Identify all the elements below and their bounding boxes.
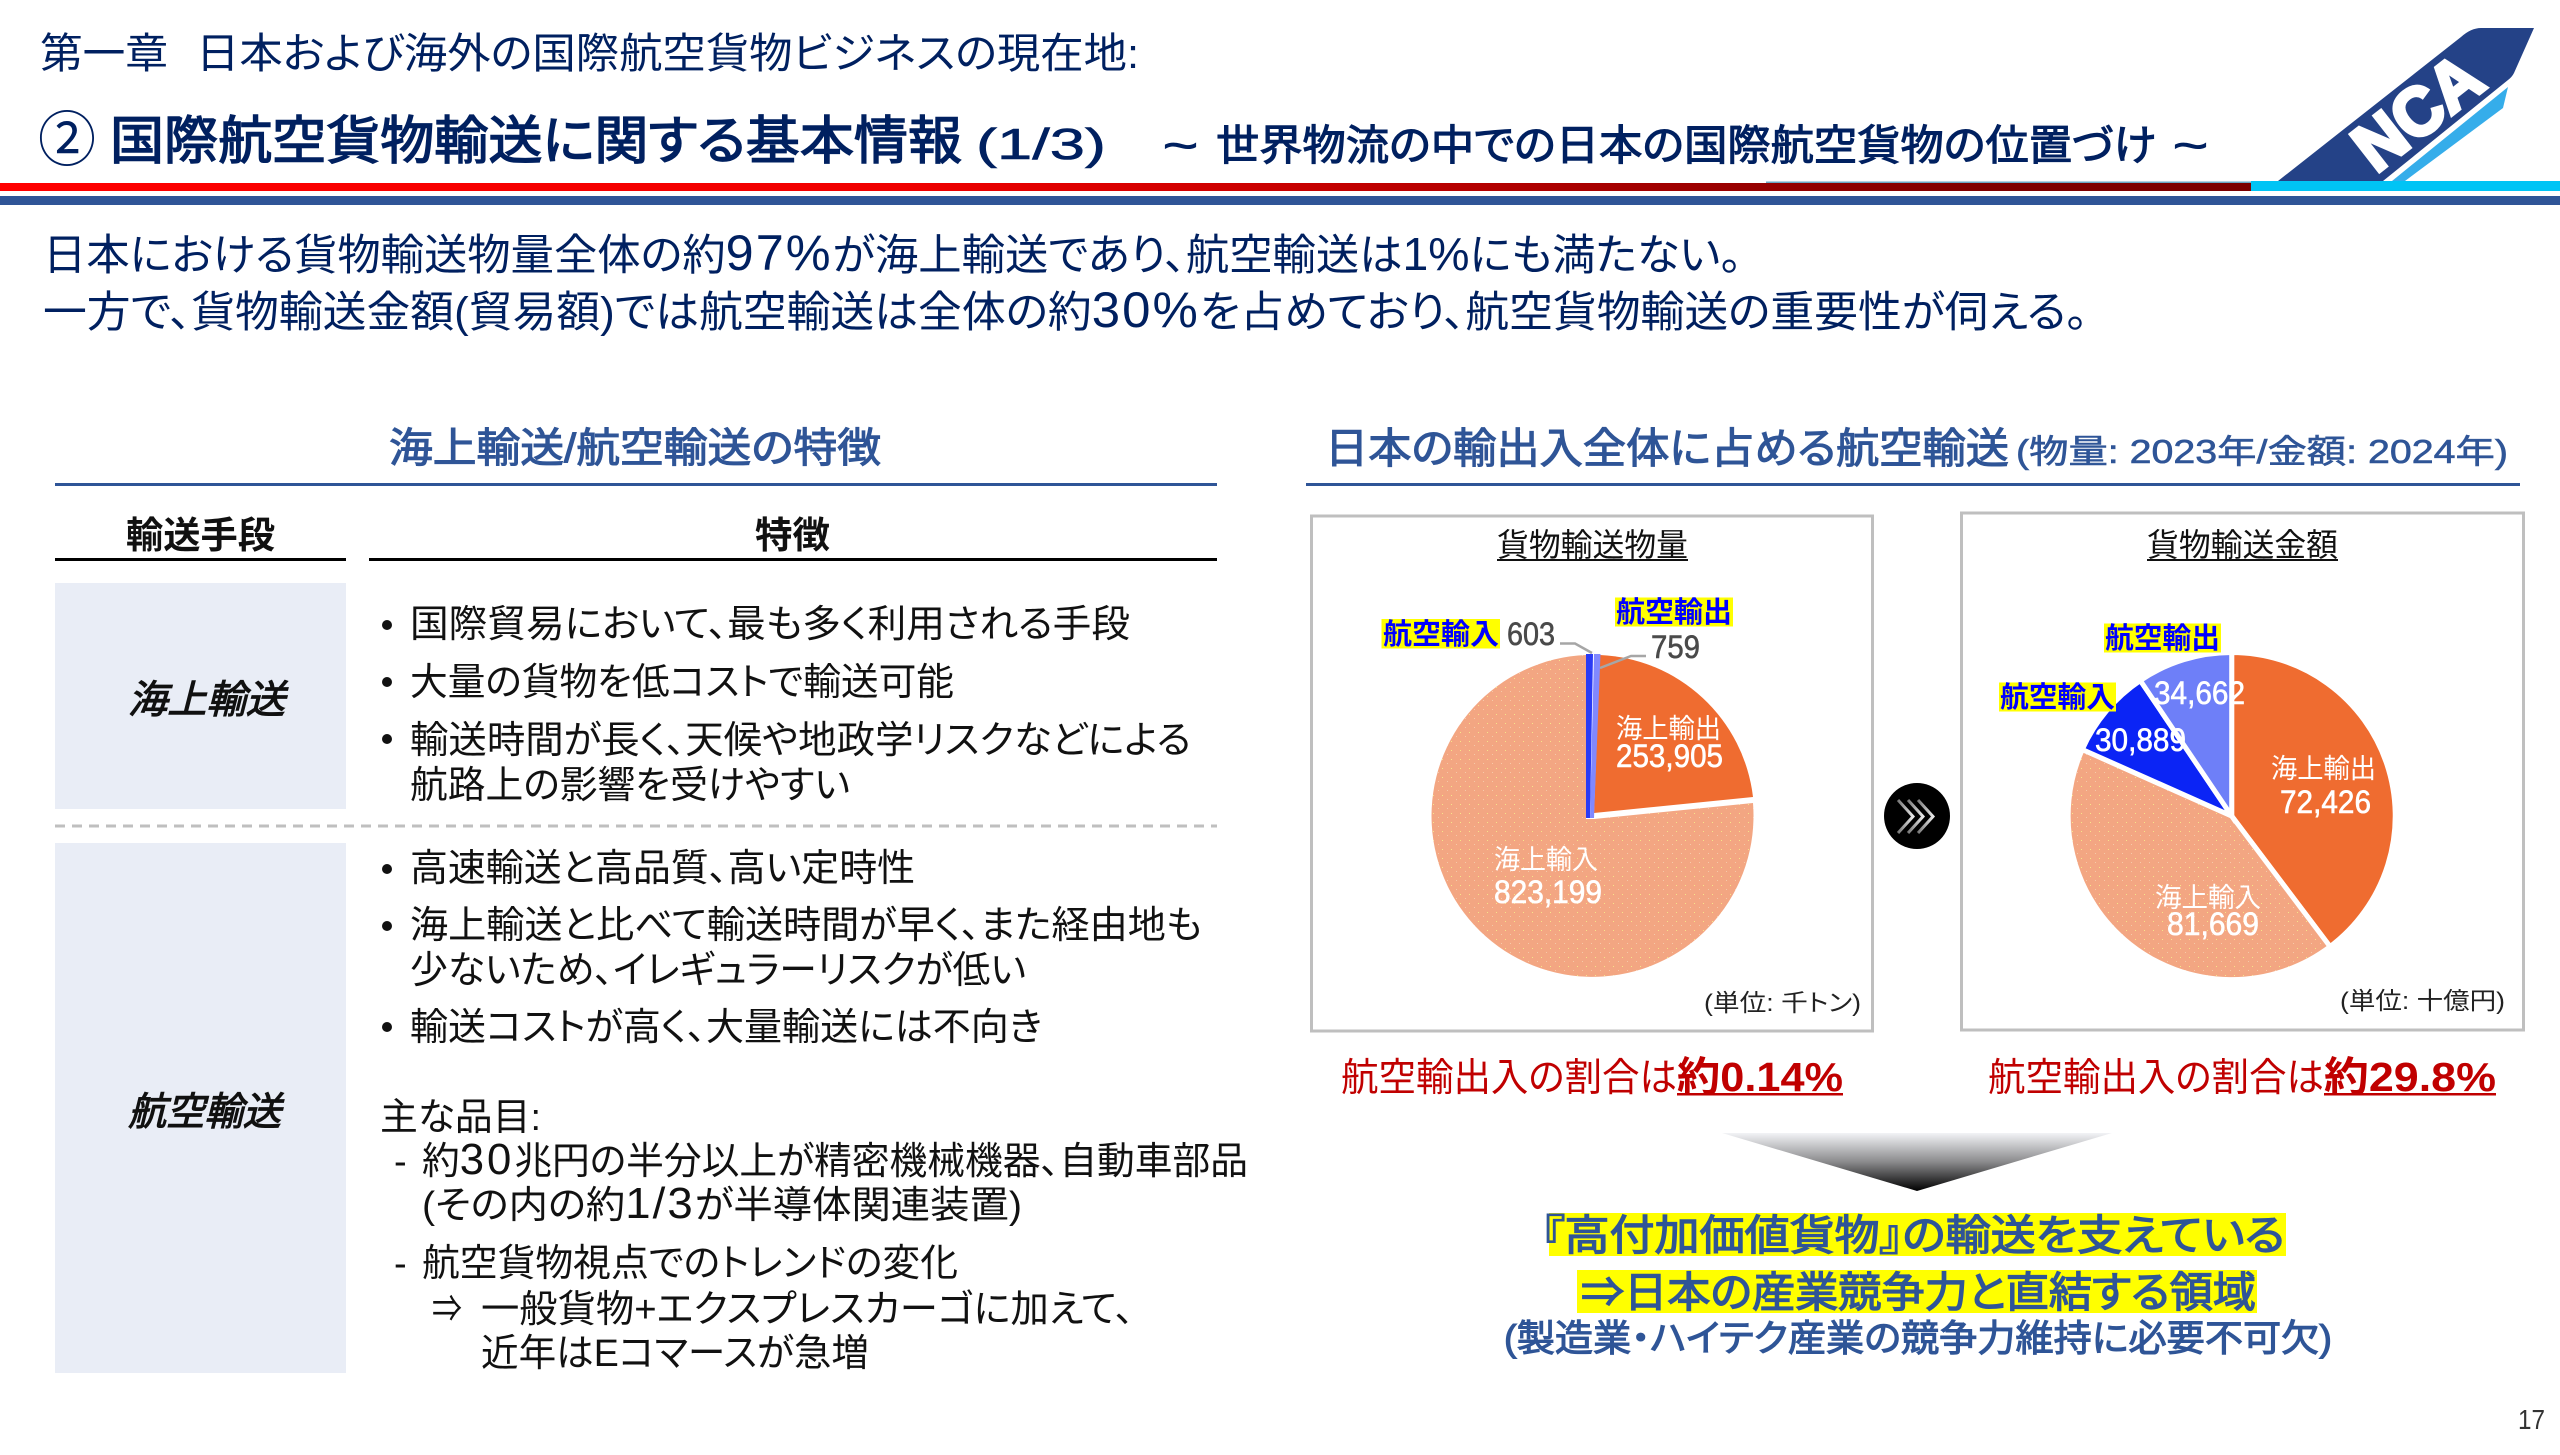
icon: NCA logo tail: NCA <box>2338 39 2497 186</box>
label: sea export value: 海上輸出 <box>2271 754 2376 784</box>
heading: air share of Japan trade: (物量: 2023年/金額: 2024年) <box>2016 433 2508 470</box>
callout: volume air share <box>1341 1054 1843 1100</box>
label: sea import volume: 823,199 <box>1494 874 1602 910</box>
label: air import value: 航空輸入 <box>2000 681 2115 714</box>
header: subtitle: ~ <box>1163 122 1198 169</box>
air transport bullet list: 高速輸送と高品質、高い定時性 <box>410 848 915 890</box>
heading: air share of Japan trade <box>1306 425 2520 486</box>
conclusion text <box>1504 1212 2332 1359</box>
label: sea export volume: 海上輸出 <box>1616 714 1721 744</box>
row label: sea transport <box>55 583 346 809</box>
sea transport bullet list: 輸送時間が長く、天候や地政学リスクなどによる <box>410 720 1191 762</box>
row label: air transport <box>55 843 346 1373</box>
table header: transport mode: 輸送手段 <box>126 515 275 556</box>
intro text: 一方で、貨物輸送金額(貿易額)では航空輸送は全体の約 30%を占めており、航空貨物輸送の重要性が伺える。 <box>43 282 2088 338</box>
table header: characteristics: 特徴 <box>755 515 830 556</box>
row label: sea transport: 海上輸送 <box>128 679 289 722</box>
callout: value air share <box>1988 1054 2496 1100</box>
main cargo items list: - <box>394 1141 407 1183</box>
pie slices: value <box>2068 652 2395 980</box>
main cargo items list <box>380 1097 1248 1375</box>
label: sea export volume <box>1616 714 1723 774</box>
chart title: value: 貨物輸送金額 <box>2147 527 2338 563</box>
header: chapter title: 第一章 <box>40 30 168 77</box>
label: air import value: 30,889 <box>2095 722 2186 758</box>
label: sea import volume: 海上輸入 <box>1494 845 1598 875</box>
header: subtitle: 世界物流の中での日本の国際航空貨物の位置づけ <box>1216 122 2156 169</box>
label: sea import value <box>2155 883 2261 942</box>
panel: cargo volume pie chart <box>1312 516 1872 1031</box>
label: air export volume <box>1615 596 1733 665</box>
label: air export value <box>2104 622 2245 711</box>
air transport bullet list: 少ないため、イレギュラーリスクが低い <box>410 950 1026 992</box>
label: sea import value: 81,669 <box>2167 906 2259 942</box>
table header: characteristics <box>369 515 1217 561</box>
label: sea import volume <box>1494 845 1602 910</box>
main cargo items list: 約30兆円の半分以上が精密機械機器、自動車部品 <box>422 1135 1248 1184</box>
header: subtitle: ~ <box>2173 122 2208 169</box>
main cargo items list: 一般貨物+エクスプレスカーゴに加えて、 <box>481 1289 1134 1331</box>
header: section title: 国際航空貨物輸送に関する基本情報 <box>110 113 962 171</box>
intro text: 日本における貨物輸送物量全体の約97%が海上輸送であり、航空輸送は1%にも満たない。 <box>43 225 1742 281</box>
heading: characteristics: 海上輸送/航空輸送の特徴 <box>389 425 881 471</box>
table header: transport mode <box>55 515 346 561</box>
panel: cargo value pie chart <box>1962 513 2524 1030</box>
label: air export volume: 759 <box>1651 629 1700 665</box>
row label: air transport: 航空輸送 <box>128 1091 285 1134</box>
callout: value air share: 航空輸出入の割合は <box>1988 1057 2324 1100</box>
main cargo items list: 航空貨物視点でのトレンドの変化 <box>422 1243 958 1285</box>
label: air import volume: 603 <box>1507 616 1555 652</box>
label: air import volume: 航空輸入 <box>1383 618 1499 651</box>
icon: NCA logo tail <box>2278 28 2534 186</box>
leader lines <box>1560 644 1646 668</box>
label: air export value: 34,662 <box>2154 675 2245 711</box>
label: sea export value <box>2271 754 2376 820</box>
sea transport bullet list <box>382 604 1191 807</box>
main cargo items list: ⇒ <box>432 1289 462 1331</box>
header: section title <box>38 107 1106 174</box>
header rule bars <box>0 181 2560 205</box>
unit note: volume: (単位: 千トン) <box>1704 990 1861 1017</box>
sea transport bullet list: 大量の貨物を低コストで輸送可能 <box>410 662 954 704</box>
heading: air share of Japan trade: 日本の輸出入全体に占める航空輸送 <box>1325 425 2009 472</box>
highlighted conclusion line one: 『高付加価値貨物』の輸送を支えている <box>1542 1212 2285 1259</box>
callout: volume air share: 約0.14% <box>1677 1054 1843 1100</box>
label: sea export value: 72,426 <box>2280 784 2371 820</box>
conclusion note: (製造業・ハイテク産業の競争力維持に必要不可欠) <box>1504 1318 2332 1359</box>
intro text <box>43 225 2088 338</box>
callout: value air share: 約29.8% <box>2324 1054 2496 1100</box>
main cargo items list: (その内の約1/3が半導体関連装置) <box>422 1179 1022 1228</box>
chart title: volume: 貨物輸送物量 <box>1497 527 1688 563</box>
label: air import volume <box>1382 616 1555 652</box>
air transport bullet list: 輸送コストが高く、大量輸送には不向き <box>410 1007 1042 1049</box>
header: section title: ② <box>38 107 96 174</box>
main cargo items list: - <box>394 1243 407 1285</box>
label: sea export volume: 253,905 <box>1616 738 1723 774</box>
sea transport bullet list: 国際貿易において、最も多く利用される手段 <box>410 604 1130 646</box>
page number: 17 <box>2518 1404 2545 1435</box>
highlighted conclusion line two: ⇒日本の産業競争力と直結する領域 <box>1581 1269 2256 1316</box>
pie slices: volume <box>1432 654 1754 977</box>
header: chapter title: 日本および海外の国際航空貨物ビジネスの現在地: <box>196 30 1139 77</box>
arrow: gradient down triangle <box>1722 1133 2112 1191</box>
air transport bullet list: 海上輸送と比べて輸送時間が早く、また経由地も <box>410 905 1202 947</box>
callout: volume air share: 航空輸出入の割合は <box>1341 1057 1677 1100</box>
sea transport bullet list: 航路上の影響を受けやすい <box>410 765 850 807</box>
unit note: value: (単位: 十億円) <box>2340 988 2505 1015</box>
main cargo items list: 近年はEコマースが急増 <box>481 1333 869 1375</box>
panel: sea and air transport characteristics <box>55 425 1248 1375</box>
main cargo items list: 主な品目: <box>380 1097 541 1139</box>
air transport bullet list <box>382 848 1202 1049</box>
label: sea import value: 海上輸入 <box>2155 883 2261 913</box>
icon: chevron arrow <box>1884 783 1950 849</box>
label: air import value <box>1999 681 2186 758</box>
label: air export volume: 航空輸出 <box>1616 596 1732 629</box>
label: air export value: 航空輸出 <box>2105 622 2220 655</box>
header: section title: (1/3) <box>976 120 1106 169</box>
